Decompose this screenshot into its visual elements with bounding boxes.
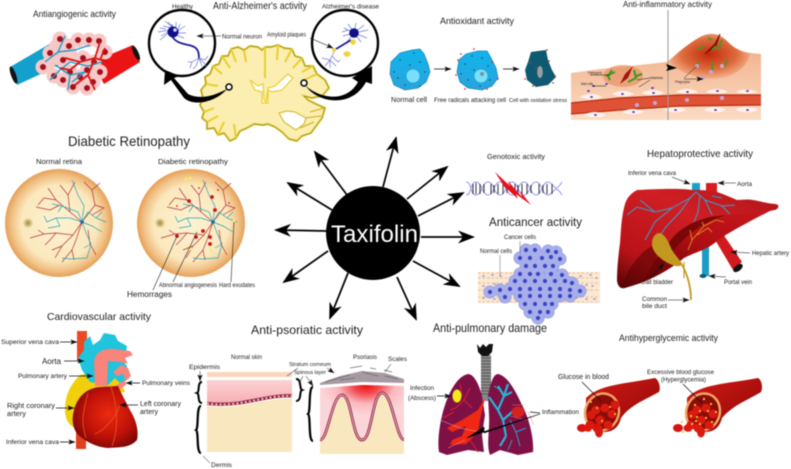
label: inferior vena cava [628,171,690,184]
label: aorta (heart): Aorta [42,357,62,366]
label: common bile duct: Common [642,297,667,303]
label: inflammation [467,409,579,438]
label: excessive blood glucose [647,370,715,403]
panel: anti-psoriatic activity [189,323,407,469]
arrow: brain to healthy circle [164,70,232,103]
label: inflammation: Inflammation [542,409,579,416]
label: epidermis: Epidermis [189,364,221,371]
label: left coronary artery [120,401,181,416]
label: abnormal angiogenesis: Abnormal angiogenesis [159,283,217,289]
label: common bile duct [642,297,689,310]
divider line [667,10,669,120]
label: hemorrages: Hemorrages [127,290,172,299]
label: diabetic retinopathy: Diabetic retinopathy [158,157,228,166]
small labels with arrows: Phagocytes [675,80,690,84]
panel: antioxidant activity [390,16,567,104]
heading: diabetic retinopathy: Diabetic Retinopathy [68,133,190,149]
label: amyloid plaques: Amyloid plaques [267,32,306,38]
label: scales: Scales [388,357,407,363]
label: glucose in blood: Glucose in blood [558,374,609,381]
illustration: lungs [438,344,534,455]
label: right coronary artery: Right coronary [7,403,56,410]
label: hepatic artery: Hepatic artery [752,251,789,257]
heading: cardiovascular: Cardiovascular activity [47,311,152,323]
panel: cardiovascular activity [1,311,190,449]
cell: free radicals attacking [456,49,498,90]
retina: normal [5,169,113,277]
label: portal vein [709,276,752,286]
brace: normal epidermis right [296,379,302,401]
hub circle [326,186,420,280]
panel: anti-pulmonary damage [408,321,579,455]
small labels with arrows: Histamines [650,76,663,80]
heading: anti-psoriatic: Anti-psoriatic activity [251,323,363,337]
arrows radiating [276,138,473,319]
illustration: DNA with lightning [466,172,562,205]
hub label: Taxifolin [331,221,418,248]
illustration: normal skin [207,372,292,452]
label: healthy: Healthy [172,4,194,10]
label: inferior vena cava: Inferior vena cava [628,171,677,177]
illustration: blood vessel network [8,36,142,90]
panel: anti-inflammatory activity [571,0,761,120]
label: spinous layer [294,370,326,386]
illustration: tumour in tissue [478,250,600,318]
brace: psoriasis spinous [308,387,313,441]
small labels with arrows: Mast cells [581,82,593,86]
panel: hepatoprotective activity [617,148,789,310]
illustration: vessel with glucose in blood [577,378,660,438]
illustration: skin tissue [571,34,761,120]
label: normal retina: Normal retina [36,157,83,166]
panel: genotoxic activity [466,152,562,205]
label: Alzheimer's disease: Alzheimer's disease [322,4,379,10]
label: normal cell: Normal cell [391,97,427,104]
label: aorta (heart) [42,357,84,366]
label: hepatic artery [731,251,789,257]
label: oxidative stress: Cell with oxidative stress [509,98,567,104]
heading: antiangiogenic: Antiangiogenic activity [33,9,116,19]
label: stratum corneum: Stratum corneum [289,362,331,368]
label: normal cells: Normal cells [480,249,512,255]
panel: anti-Alzheimer's activity [149,1,379,141]
label: excessive blood glucose: Excessive blood glucose [647,370,715,376]
label: infection abscess [408,385,451,402]
label: left coronary artery: Left coronary [140,401,181,408]
label: portal vein: Portal vein [724,280,752,286]
illustration: vessel with hyperglycemia [673,378,762,438]
arrow: brain to Alzheimer's circle [301,66,372,100]
label: right coronary artery [7,403,74,418]
label: infection abscess: Infection [410,385,434,392]
cell: oxidative stress [525,50,556,87]
panel: antiangiogenic activity [8,9,142,90]
callout circle: Alzheimer's neuron [312,10,378,76]
heading: genotoxic: Genotoxic activity [487,152,545,161]
heading: antioxidant: Antioxidant activity [440,16,514,27]
illustration: brain cross section [200,45,329,141]
heading: anti-pulmonary: Anti-pulmonary damage [433,321,547,335]
label: aorta [718,182,753,188]
heading: anti-Alzheimer's: Anti-Alzheimer's activity [213,1,307,12]
label: gall bladder [641,264,673,286]
label: free radicals: Free radicals attacking cell [434,97,507,104]
label: amyloid plaques [267,32,333,48]
label: excessive blood glucose: (Hyperglycemia) [661,378,706,384]
label: right coronary artery: artery [7,411,27,418]
label: scales [385,357,407,372]
label: aorta: Aorta [737,182,753,188]
callout circle: healthy neuron [149,10,215,76]
small labels with arrows [581,66,703,87]
label: pulmonary artery: Pulmonary artery [18,373,68,380]
label: stratum corneum [287,362,334,376]
label: cancer cells: Cancer cells [504,235,536,241]
label: glucose in blood [558,374,609,401]
label: normal skin: Normal skin [231,355,262,361]
label: normal neuron [197,34,262,40]
label: psoriasis: Psoriasis [353,355,377,361]
label: dermis [203,456,233,469]
label: spinous layer: Spinous layer [294,370,326,376]
label: hard exudates: Hard exudates [219,283,255,289]
panel: antihyperglycemic activity [558,333,762,438]
arrow [503,68,519,70]
brace: epidermis [197,382,202,403]
label: epidermis [189,364,221,381]
label: common bile duct: bile duct [642,304,667,310]
label: pulmonary veins: Pulmonary veins [142,380,190,387]
arrowhead: progression [666,64,677,71]
callout lines: retina labels [153,222,234,290]
label: normal neuron: Normal neuron [222,34,262,40]
panel: anticancer activity [478,217,600,318]
retina: diabetic [137,169,245,277]
label: left coronary artery: artery [140,409,158,416]
label: gall bladder: Gall bladder [641,280,673,286]
small labels with arrows: Pathogens [588,71,602,75]
label: inferior vena cava (heart): Inferior vena cava [6,439,59,446]
label: superior vena cava: Superior vena cava [1,339,59,346]
central hub: Taxifolin [276,138,473,319]
label: infection abscess: (Abscess) [408,395,436,402]
illustration: psoriasis skin [320,366,404,454]
cell: normal [390,49,430,90]
heading: antihyperglycemic: Antihyperglycemic activity [619,333,718,344]
heading: hepatoprotective: Hepatoprotective activity [647,148,754,160]
brace: dermis [196,406,201,453]
arrow [434,68,451,70]
illustration: liver [617,183,778,300]
panel: diabetic retinopathy [5,133,255,299]
label: dermis: Dermis [211,462,233,469]
heading: anticancer: Anticancer activity [489,217,582,229]
label: pulmonary artery [18,373,93,380]
illustration: heart [65,331,138,449]
